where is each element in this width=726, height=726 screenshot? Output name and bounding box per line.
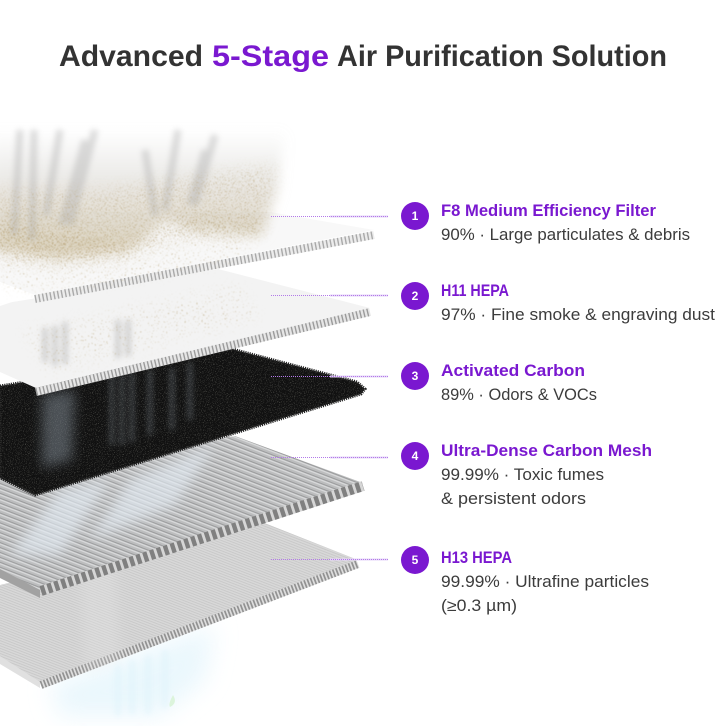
clean air glow below the filter stack: [50, 625, 215, 716]
stage 3 label: 89% · Odors & VOCs: [441, 386, 597, 404]
stage 2 label: 97% · Fine smoke & engraving dust: [441, 306, 715, 324]
stage 4 label: 4: [412, 449, 419, 463]
filter layer 5: H13 HEPA: [0, 522, 358, 688]
title: Air Purification Solution: [337, 40, 667, 73]
title: 5-Stage: [212, 40, 329, 73]
filter layer 4: Ultra-Dense Carbon Mesh: [0, 436, 363, 598]
stage 3 label: Activated Carbon: [441, 362, 585, 380]
filter layer 2: H11 HEPA: [0, 269, 370, 392]
stage 5 label: 99.99% · Ultrafine particles: [441, 573, 649, 591]
stage 1 label: 90% · Large particulates & debris: [441, 226, 690, 244]
stage 4 label: [401, 442, 652, 508]
stage 5 label: 5: [412, 553, 419, 567]
stage 2 label: 2: [412, 289, 419, 303]
stage 5 label: (≥0.3 µm): [441, 597, 517, 615]
incoming dust cloud: [0, 130, 285, 292]
title: [59, 40, 667, 73]
stage 3 label: [401, 362, 597, 404]
stage 2 label: H11 HEPA: [441, 282, 509, 300]
icon: green leaf: [169, 695, 175, 707]
filter layer 1: F8 Medium Efficiency Filter: [0, 212, 374, 299]
stage 1 label: [401, 202, 690, 244]
stage 2 label: [401, 282, 715, 324]
stage 3 label: 3: [412, 369, 419, 383]
stage 4 label: Ultra-Dense Carbon Mesh: [441, 442, 652, 460]
stage 4 label: & persistent odors: [441, 490, 586, 508]
stage 1 label: F8 Medium Efficiency Filter: [441, 202, 657, 220]
stage 4 label: 99.99% · Toxic fumes: [441, 466, 604, 484]
stage 5 label: H13 HEPA: [441, 549, 512, 567]
leader lines: [271, 216, 388, 560]
stage 5 label: [401, 546, 649, 615]
title: Advanced: [59, 40, 203, 73]
filter layer 3: Activated Carbon: [0, 349, 365, 495]
stage 1 label: 1: [412, 209, 419, 223]
